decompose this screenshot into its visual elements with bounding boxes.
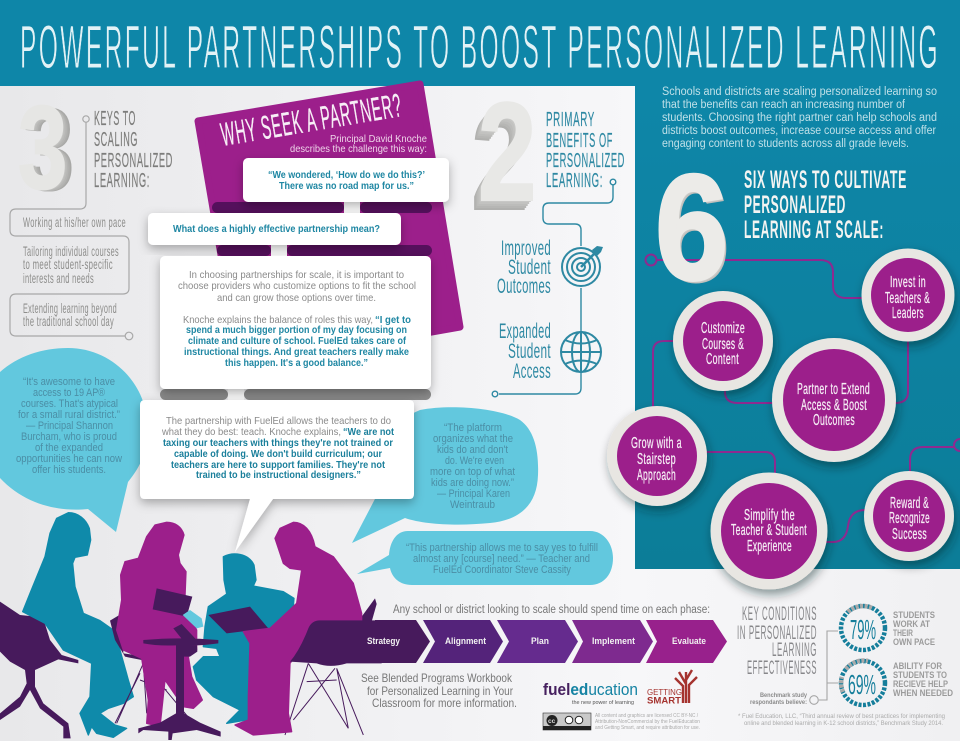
footnote: * Fuel Education, LLC, “Third annual review of best practices for implementing — [738, 714, 945, 720]
logo: fueleducation: the new power of learning — [572, 700, 634, 706]
people silhouettes — [0, 513, 382, 740]
circle: partner: Partner to Extend — [797, 381, 870, 398]
list: 3 keys — [23, 214, 126, 329]
bubble: Burcham quote: offer his students. — [32, 464, 106, 476]
circle: reward: Success — [892, 526, 927, 543]
box: choosing partnerships — [160, 256, 431, 389]
speech box: teachers: capable of doing. We don't build curriculum; our — [174, 448, 382, 460]
man: right — [235, 522, 362, 735]
bubble: Weintraub quote: Weintraub — [450, 499, 495, 511]
arrow: implement — [572, 620, 653, 663]
arrow: plan — [497, 620, 578, 663]
speech box: teachers: teachers are here to support families. They're not — [171, 459, 385, 471]
heading: 3 keys: LEARNING: — [94, 170, 150, 192]
bubble: Burcham quote: — Principal Shannon — [26, 420, 113, 432]
bubble: Weintraub quote: do. We're even — [445, 455, 504, 467]
connector wire: 2 benefits — [492, 179, 616, 397]
list: 3 keys: to meet student-specific — [23, 256, 113, 272]
heading: 2 benefits: BENEFITS OF — [546, 130, 613, 152]
box: choosing partnerships: this happen. It's a good balance.” — [225, 357, 368, 369]
numeral: 2: 2 — [478, 73, 536, 230]
woman: middle — [117, 522, 202, 727]
subheading: principal: describes the challenge this way: — [290, 143, 427, 155]
text: WHY SEEK A PARTNER? — [218, 86, 405, 153]
bubble: Weintraub quote: — Principal Karen — [437, 488, 510, 500]
caption: phases: Any school or district looking to scale should spend time on each phase: — [393, 604, 710, 616]
box: choosing partnerships: instructional things. And great teachers really make — [184, 346, 409, 358]
chair: right seat — [290, 620, 382, 666]
heading: 3 keys: KEYS TO — [94, 108, 136, 130]
bubble: Burcham quote: access to 19 AP® — [33, 387, 105, 399]
panel: six ways background — [635, 86, 960, 569]
speech box: teachers: trained to be instructional designers.” — [196, 469, 361, 481]
logo: getting smart — [647, 670, 697, 706]
subheading: principal: Principal David Knoche — [330, 133, 427, 145]
box: we wondered: “We wondered, ‘How do we do this?’ — [268, 170, 425, 181]
text: EFFECTIVENESS — [747, 658, 817, 679]
box: choosing partnerships: choose providers who customize options to fit the school — [178, 280, 416, 292]
box: choosing partnerships: “I get to — [375, 314, 411, 326]
arrow: alignment — [423, 620, 503, 663]
circle: partner: Access & Boost — [801, 397, 867, 414]
speech box: teachers: what they do best: teach. Knoche explains, — [161, 426, 341, 438]
heading: 2 benefits: PRIMARY — [546, 109, 595, 131]
stat: 69 percent — [841, 661, 885, 705]
circle: customize: Content — [706, 351, 739, 368]
bubble: Weintraub quote: more on top of what — [430, 466, 515, 478]
see blended programs note — [361, 671, 517, 710]
speech box: teachers: “We are not — [343, 426, 394, 438]
stat: 79 percent — [841, 606, 885, 650]
woman: left — [23, 513, 133, 737]
benefit label: outcomes: Outcomes — [497, 275, 551, 298]
benchmark label: Benchmark study — [760, 692, 807, 699]
benefit label: outcomes — [497, 237, 551, 298]
list: 3 keys: the traditional school day — [23, 313, 114, 329]
arrow: evaluate: Evaluate — [672, 636, 706, 647]
bubble: Burcham quote: “It's awesome to have — [23, 376, 115, 388]
circle: partner: Outcomes — [813, 412, 855, 429]
header band — [0, 0, 960, 86]
subheading: principal — [290, 133, 427, 155]
benchmark label: respondants believe: — [750, 699, 807, 706]
license text — [595, 713, 700, 731]
stat label: own pace: WORK AT — [893, 619, 930, 630]
table — [138, 624, 221, 740]
box: choosing partnerships: Knoche explains the balance of roles this way, — [183, 314, 373, 326]
stat label: own pace: OWN PACE — [893, 637, 935, 648]
arrow: evaluate — [646, 620, 727, 663]
bubble: Cassity quote: almost any [course] need.” — Teacher and — [413, 553, 590, 565]
intro paragraph: students. Choosing the right partner can help schools and — [662, 112, 937, 124]
license text: All content and graphics are licensed CC BY-NC / — [595, 713, 699, 719]
circle: partner — [772, 338, 896, 462]
arrow: plan: Plan — [531, 636, 549, 647]
stat: 79 percent: 79% — [850, 614, 876, 645]
circle: reward — [864, 471, 954, 561]
stat label: own pace: THEIR — [893, 628, 913, 639]
bubble: Weintraub quote: kids are doing now.” — [431, 477, 514, 489]
chair: right back — [362, 598, 377, 622]
text: LEARNING — [772, 640, 817, 661]
heading: 3 keys — [94, 108, 173, 192]
bubble: Cassity quote: FuelEd Coordinator Steve Cassity — [433, 564, 571, 576]
heading: key conditions — [737, 604, 817, 679]
bubble: Weintraub quote: kids do and don't — [437, 444, 508, 456]
list: 3 keys: Extending learning beyond — [23, 300, 117, 316]
see blended programs note: See Blended Programs Workbook — [361, 671, 513, 685]
bubble: Burcham quote: of the expanded — [35, 442, 103, 454]
list: 3 keys: Tailoring individual courses — [23, 243, 119, 259]
stat label: help: STUDENTS TO — [893, 670, 947, 681]
bubble: Burcham quote — [0, 348, 148, 532]
benefit label: access — [499, 320, 551, 383]
bubble: Weintraub quote: “The platform — [444, 422, 502, 434]
box: we wondered: There was no road map for us.” — [279, 181, 414, 192]
panel: why seek a partner — [198, 84, 460, 366]
benefit label: outcomes: Student — [508, 256, 551, 279]
arrow: strategy: Strategy — [367, 636, 401, 647]
box: effective partnership question: What does a highly effective partnership mean? — [173, 223, 380, 235]
circle: grow — [607, 406, 707, 506]
stat label: help: ABILITY FOR — [893, 661, 942, 672]
stat: 69 percent: 69% — [848, 669, 876, 700]
box: choosing partnerships: and can grow those options over time. — [217, 292, 376, 304]
text: IN PERSONALIZED — [737, 623, 817, 644]
chair: middle — [110, 613, 193, 723]
footnote: online and blended learning in K-12 school districts,” Benchmark Study 2014. — [744, 721, 943, 727]
intro paragraph: Schools and districts are scaling personalized learning so — [662, 86, 937, 98]
logo: getting smart: SMART — [647, 696, 681, 706]
hand — [183, 610, 203, 628]
man: crouching — [193, 554, 294, 723]
intro paragraph — [662, 86, 937, 150]
bracket connector — [810, 631, 838, 704]
bubble: Weintraub quote — [352, 407, 538, 543]
numeral: 6: 6 — [655, 143, 728, 311]
speech box: teachers — [140, 400, 414, 552]
chair: right legs — [285, 663, 363, 735]
bubble: Weintraub quote: organizes what the — [433, 433, 513, 445]
circle: customize: Customize — [701, 320, 745, 337]
bubble: Burcham quote: courses. That's atypical — [21, 398, 118, 410]
heading: 2 benefits: LEARNING: — [546, 170, 603, 192]
box: choosing partnerships: spend a much bigger portion of my day focusing on — [186, 324, 407, 336]
bubble: Cassity quote: “This partnership allows me to say yes to fulfill — [406, 542, 598, 554]
intro paragraph: that the benefits can reach an increasing number of — [662, 99, 906, 111]
creative commons badge — [543, 713, 591, 730]
stat label: help — [893, 661, 953, 699]
box: choosing partnerships: In choosing partnerships for scale, it is important to — [189, 269, 404, 281]
laptop: middle — [153, 588, 192, 617]
heading: six ways — [744, 166, 907, 244]
box: choosing partnerships: climate and culture of school. FuelEd takes care of — [188, 335, 406, 347]
outline connector: 3 keys list — [10, 116, 133, 340]
logo: fueleducation: fueleducation — [543, 681, 638, 699]
see blended programs note: for Personalized Learning in Your — [367, 684, 513, 698]
book — [208, 607, 268, 633]
logo: getting smart: GETTING — [647, 688, 682, 697]
stat label: own pace — [893, 610, 935, 648]
list: 3 keys: Working at his/her own pace — [23, 214, 126, 230]
benchmark label — [750, 692, 807, 706]
bubble: Burcham quote: opportunities he can now — [16, 453, 122, 465]
text: PERSONALIZED — [94, 150, 173, 172]
arrow: strategy — [367, 620, 430, 663]
circle: invest: Leaders — [892, 305, 924, 322]
heading: 2 benefits — [546, 109, 625, 192]
bubble: Burcham quote: for a small rural district.” — [18, 409, 120, 421]
circle: customize — [673, 291, 773, 391]
footnote — [738, 714, 945, 727]
circle: simplify: Teacher & Student — [731, 522, 807, 539]
box: we wondered — [243, 158, 449, 202]
benefit label: access: Student — [508, 340, 551, 363]
intro paragraph: districts boost outcomes, increase course access and offer — [662, 125, 936, 137]
circle: grow: Stairstep — [637, 451, 676, 468]
license text: Attribution-NonCommercial by the FuelEducation — [595, 719, 700, 725]
intro paragraph: engaging content to students across all grade levels. — [662, 138, 909, 150]
circle: grow: Grow with a — [631, 435, 682, 452]
creative commons badge: cc — [548, 718, 556, 725]
bubble: Cassity quote — [357, 531, 613, 585]
icon: target — [560, 246, 603, 288]
arrow: implement: Implement — [592, 636, 636, 647]
process arrows — [367, 620, 727, 663]
numeral: 3: 3 — [18, 82, 67, 214]
circle: grow: Approach — [637, 467, 676, 484]
speech box: teachers: taxing our teachers with things they're not trained or — [163, 437, 393, 449]
stat label: own pace: STUDENTS — [893, 610, 935, 621]
see blended programs note: Classroom for more information. — [372, 696, 517, 710]
circle: simplify — [710, 472, 828, 590]
license text: and Getting Smart, and require attribution for use. — [595, 725, 700, 731]
circle: simplify: Experience — [747, 538, 792, 555]
text: PERSONALIZED — [546, 150, 625, 172]
bubble: Burcham quote: Burcham, who is proud — [21, 431, 117, 443]
box: effective partnership question — [148, 213, 401, 245]
benefit label: outcomes: Improved — [501, 237, 551, 260]
arrow: alignment: Alignment — [445, 636, 487, 647]
speech box: teachers: The partnership with FuelEd allows the teachers to do — [166, 415, 391, 427]
heading: six ways: PERSONALIZED — [744, 191, 846, 219]
icon: globe — [561, 332, 601, 372]
benefit label: access: Access — [513, 360, 551, 383]
circle: invest: Invest in — [890, 274, 926, 291]
circle: simplify: Simplify the — [744, 507, 795, 524]
text: KEY CONDITIONS — [742, 604, 817, 625]
list: 3 keys: interests and needs — [23, 270, 94, 286]
box shadows between boxes — [160, 200, 432, 402]
chair: left — [0, 602, 78, 738]
circle: customize: Courses & — [702, 336, 744, 353]
heading: 3 keys: SCALING — [94, 129, 138, 151]
circle: invest — [862, 248, 954, 342]
connector wires: six ways — [646, 254, 960, 542]
benefit label: access: Expanded — [499, 320, 551, 343]
